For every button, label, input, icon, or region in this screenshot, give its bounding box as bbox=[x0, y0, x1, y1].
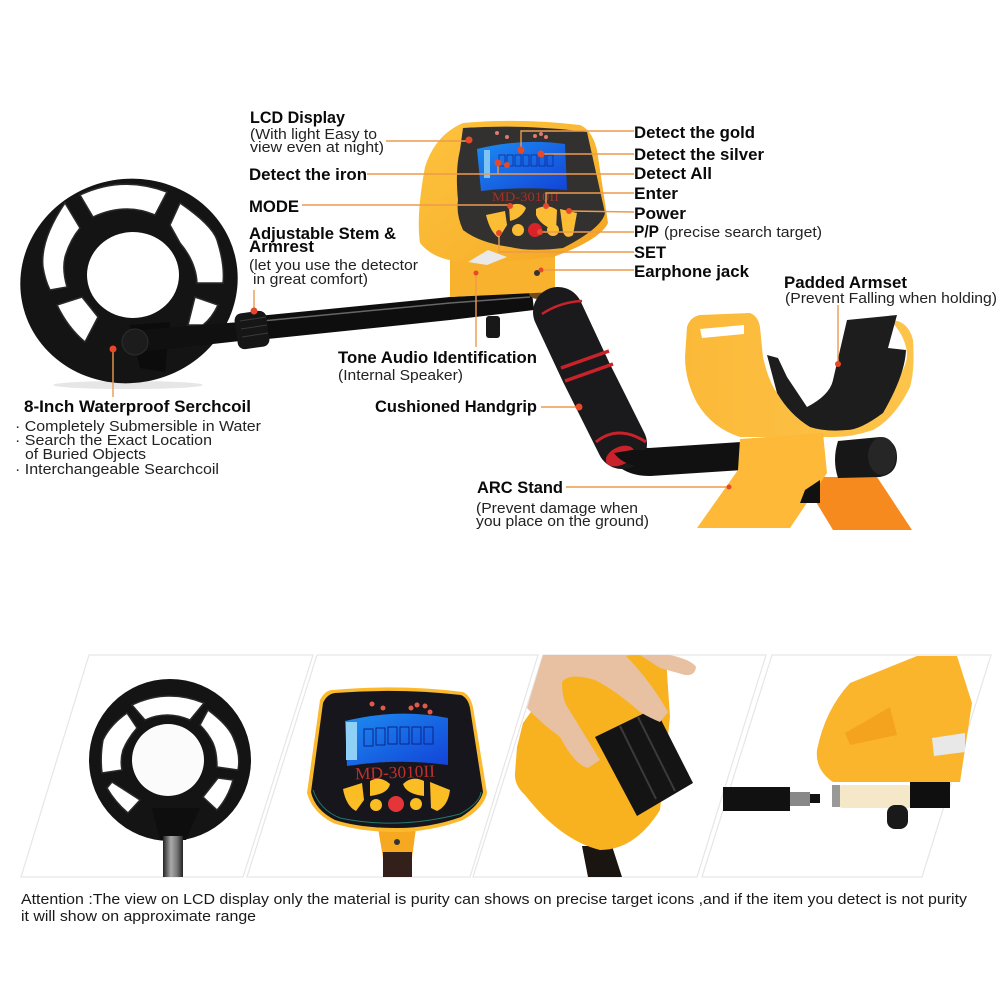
panel 3: battery compartment bbox=[473, 655, 766, 877]
attention note: it will show on approximate range bbox=[21, 908, 256, 925]
label: detect the silver: Detect the silver bbox=[634, 146, 765, 164]
label: padded armset bbox=[784, 274, 997, 307]
label: earphone jack: Earphone jack bbox=[634, 263, 750, 281]
label: ARC stand bbox=[476, 479, 649, 530]
panel 2: control panel close-up bbox=[247, 655, 538, 877]
dark face bbox=[311, 691, 483, 828]
label: detect the iron: Detect the iron bbox=[249, 166, 367, 184]
handgrip bbox=[542, 301, 660, 470]
searchcoil bbox=[1, 159, 257, 403]
label: ARC stand: (Prevent damage when bbox=[476, 500, 638, 517]
label: tone audio bbox=[338, 349, 537, 384]
label: adjustable stem bbox=[249, 225, 418, 288]
label: adjustable stem: (let you use the detector bbox=[249, 257, 418, 274]
label: searchcoil features: 8-Inch Waterproof Serchcoil bbox=[24, 398, 251, 416]
label: LCD display: (With light Easy to bbox=[250, 126, 377, 143]
orange rear leg bbox=[813, 477, 912, 530]
label: mode: MODE bbox=[249, 198, 299, 216]
yellow bezel bbox=[307, 687, 487, 832]
strap slot bbox=[700, 325, 744, 338]
label: enter: Enter bbox=[634, 185, 679, 203]
battery handle bbox=[582, 846, 622, 877]
label: adjustable stem: Armrest bbox=[249, 238, 315, 256]
model name: MD-3010II bbox=[492, 189, 559, 204]
coil bbox=[89, 679, 251, 841]
indicator dots bbox=[495, 131, 548, 139]
label: P/P: P/P bbox=[634, 223, 659, 241]
label: LCD display: view even at night) bbox=[250, 139, 384, 156]
control box bbox=[419, 121, 608, 297]
stem bbox=[378, 828, 416, 877]
teal line bbox=[313, 790, 481, 823]
panel 1: searchcoil close-up bbox=[21, 655, 313, 877]
label: set: SET bbox=[634, 244, 666, 262]
lower curved tube bbox=[620, 440, 742, 462]
label: tone audio: Tone Audio Identification bbox=[338, 349, 537, 367]
little finger bbox=[640, 655, 696, 675]
shaft bbox=[163, 836, 183, 877]
main product: metal detector bbox=[1, 121, 914, 530]
padded arm strap bbox=[767, 315, 906, 431]
model name: MD-3010II bbox=[355, 762, 436, 783]
label: padded armset: Padded Armset bbox=[784, 274, 908, 292]
label: adjustable stem: Adjustable Stem & bbox=[249, 225, 396, 243]
indicator dots bbox=[370, 702, 432, 714]
yellow housing bbox=[515, 655, 670, 850]
label: searchcoil features: · Search the Exact Location bbox=[15, 432, 212, 449]
hand bbox=[527, 655, 668, 768]
attention note: Attention :The view on LCD display only the material is purity can shows on precise target icons ,and if the item you detect is not purity bbox=[21, 891, 968, 908]
earphone jack bbox=[534, 270, 540, 276]
barcode label bbox=[468, 250, 507, 265]
end knob bbox=[835, 437, 897, 478]
label: tone audio: (Internal Speaker) bbox=[338, 367, 463, 384]
label: cushioned handgrip: Cushioned Handgrip bbox=[375, 398, 537, 416]
panel buttons bbox=[486, 204, 577, 238]
yellow housing bbox=[817, 656, 972, 782]
label: ARC stand: ARC Stand bbox=[477, 479, 563, 497]
label: detect the gold: Detect the gold bbox=[634, 124, 755, 142]
battery holder bbox=[595, 708, 693, 816]
ARC stand bbox=[697, 433, 827, 528]
label: searchcoil features: · Interchangeable Searchcoil bbox=[15, 461, 219, 478]
label: power: Power bbox=[634, 205, 687, 223]
label: padded armset: (Prevent Falling when holding) bbox=[785, 290, 997, 307]
label: searchcoil features: · Completely Submersible in Water bbox=[15, 418, 261, 435]
side vent bbox=[845, 707, 897, 745]
control panel face bbox=[457, 127, 605, 250]
attention note bbox=[21, 891, 968, 925]
callout lines and dots bbox=[110, 131, 841, 490]
connector stem bbox=[723, 782, 950, 829]
label: searchcoil features bbox=[15, 398, 261, 478]
label: P/P: (precise search target) bbox=[664, 224, 822, 241]
buttons bbox=[343, 779, 450, 812]
label: LCD display bbox=[250, 109, 384, 156]
label: detect all: Detect All bbox=[634, 165, 712, 183]
stand bracket bbox=[800, 480, 820, 503]
armrest cup bbox=[685, 313, 914, 437]
LCD screen bbox=[345, 714, 448, 766]
label: adjustable stem: in great comfort) bbox=[253, 271, 368, 288]
panel 4: stem connector bbox=[702, 655, 991, 877]
label: LCD display: LCD Display bbox=[250, 109, 346, 127]
label: searchcoil features: of Buried Objects bbox=[25, 446, 146, 463]
adjustable stem shaft bbox=[122, 287, 547, 355]
label sticker bbox=[932, 733, 965, 756]
LCD screen bbox=[477, 142, 567, 191]
label: ARC stand: you place on the ground) bbox=[476, 513, 649, 530]
